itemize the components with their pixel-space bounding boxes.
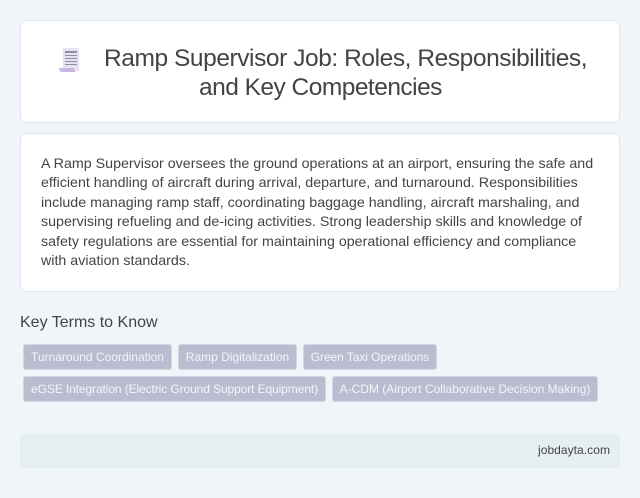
chip: green taxi operations bbox=[303, 344, 437, 370]
chip: turnaround coordination: Turnaround Coordination bbox=[31, 350, 164, 364]
footer bar bbox=[20, 434, 620, 468]
description text: safety regulations are essential for maintaining operational efficiency and compliance bbox=[41, 234, 576, 250]
heading: key terms: Key Terms to Know bbox=[20, 314, 158, 331]
title: and Key Competencies bbox=[199, 74, 442, 101]
chip: A-CDM bbox=[332, 376, 598, 402]
title bbox=[104, 45, 587, 101]
panel: title card bbox=[20, 20, 620, 123]
chip: eGSE integration: eGSE Integration (Electric Ground Support Equipment) bbox=[31, 382, 318, 396]
panel: description card bbox=[20, 133, 620, 292]
description text: efficient handling of aircraft during arrival, departure, and turnaround. Responsibilities bbox=[41, 175, 578, 191]
chip: ramp digitalization: Ramp Digitalization bbox=[186, 350, 289, 364]
chip: turnaround coordination bbox=[23, 344, 172, 370]
chip: ramp digitalization bbox=[178, 344, 297, 370]
description text: supervising refueling and de-icing activities. Strong leadership skills and knowledge of bbox=[41, 214, 582, 230]
title: Ramp Supervisor Job: Roles, Responsibilities, bbox=[104, 45, 587, 72]
icon: document scroll bbox=[59, 48, 79, 72]
chip: green taxi operations: Green Taxi Operations bbox=[311, 350, 429, 364]
description text: A Ramp Supervisor oversees the ground operations at an airport, ensuring the safe and bbox=[41, 156, 593, 172]
chip: A-CDM: A-CDM (Airport Collaborative Decision Making) bbox=[340, 382, 590, 396]
footer source: jobdayta.com bbox=[538, 443, 610, 457]
term chips bbox=[23, 344, 598, 402]
description text bbox=[41, 156, 593, 269]
description text: include managing ramp staff, coordinating baggage handling, aircraft marshaling, and bbox=[41, 194, 579, 210]
chip: eGSE integration bbox=[23, 376, 326, 402]
description text: with aviation standards. bbox=[41, 253, 190, 269]
